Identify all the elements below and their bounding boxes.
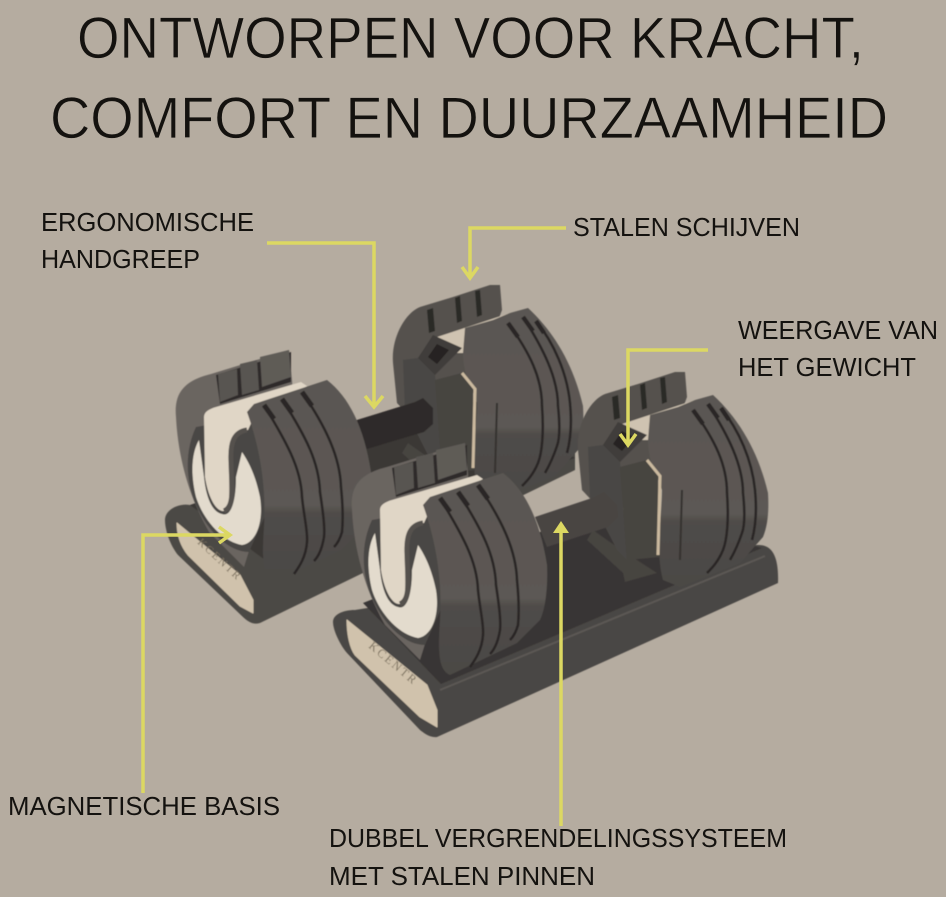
label: weergave van het gewicht: HET GEWICHT <box>738 352 916 382</box>
arrow: gewicht <box>620 350 708 445</box>
title: COMFORT EN DUURZAAMHEID <box>50 86 888 151</box>
title: ONTWORPEN VOOR KRACHT, <box>77 6 864 71</box>
arrow: basis <box>143 527 230 793</box>
back dumbbell left weight <box>176 350 371 582</box>
label: dubbel vergrendelingssysteem: MET STALEN PINNEN <box>329 861 595 891</box>
front dumbbell base: KCENTR <box>366 639 421 688</box>
front dumbbell base <box>333 510 778 737</box>
label: magnetische basis: MAGNETISCHE BASIS <box>8 791 280 821</box>
arrow: handgreep <box>267 243 383 407</box>
label: ergonomische handgreep: ERGONOMISCHE <box>41 207 254 237</box>
label: ergonomische handgreep: HANDGREEP <box>41 244 200 274</box>
label: weergave van het gewicht <box>738 315 938 382</box>
front dumbbell right weight <box>578 372 768 587</box>
label: dubbel vergrendelingssysteem: DUBBEL VERGRENDELINGSSYSTEEM <box>329 823 787 853</box>
back dumbbell base: KCENTR <box>195 536 244 583</box>
back dumbbell base <box>165 400 575 624</box>
front dumbbell left weight <box>352 443 547 675</box>
image: two adjustable dumbbells on bases <box>165 285 778 737</box>
label: weergave van het gewicht: WEERGAVE VAN <box>738 315 938 345</box>
front dumbbell handle <box>535 492 618 547</box>
label: stalen schijven: STALEN SCHIJVEN <box>573 212 800 242</box>
back dumbbell right weight <box>393 285 583 500</box>
title <box>50 6 888 151</box>
arrow: schijven <box>462 228 566 278</box>
label: dubbel vergrendelingssysteem <box>329 823 787 891</box>
back dumbbell handle <box>347 398 433 452</box>
arrow: vergrendeling <box>553 521 569 826</box>
label: ergonomische handgreep <box>41 207 254 274</box>
